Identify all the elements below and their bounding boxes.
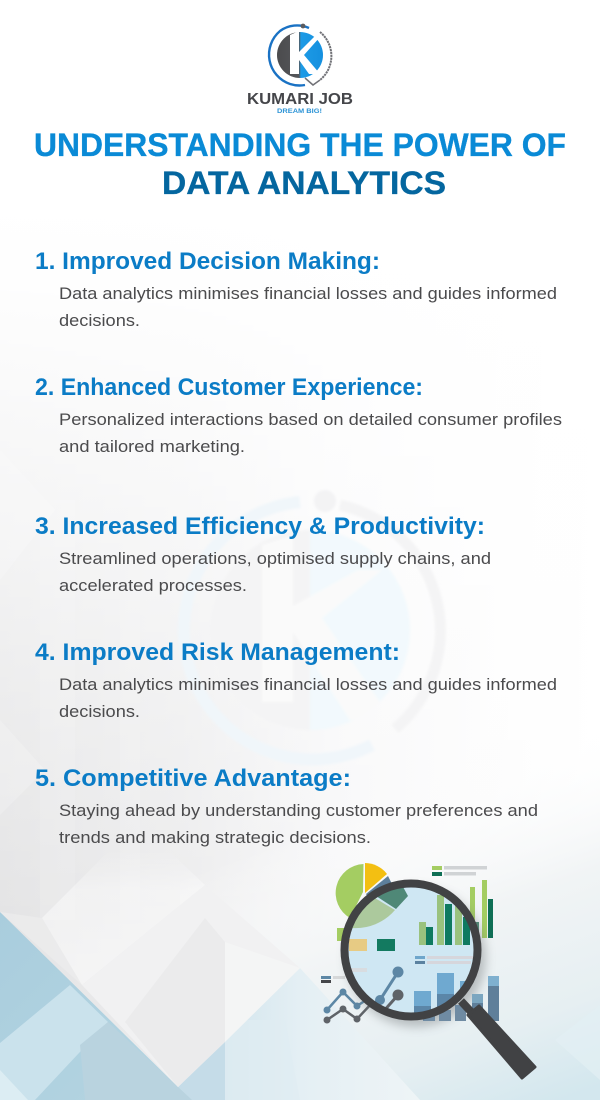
section 2: [35, 374, 562, 456]
lens shadow: [346, 887, 486, 1027]
section 5: 5. Competitive Advantage:: [35, 765, 351, 792]
watermark logo: [222, 492, 444, 764]
tagline: DREAM BIG!: [277, 108, 322, 115]
section 4: decisions.: [59, 702, 140, 721]
section 1: Data analytics minimises financial losses and guides informed: [59, 284, 557, 303]
outer bars: [470, 880, 493, 938]
section 3: accelerated processes.: [59, 576, 247, 595]
section 2: 2. Enhanced Customer Experience:: [35, 374, 423, 401]
section 5: [35, 765, 538, 847]
title: DATA ANALYTICS: [162, 165, 446, 201]
top bar chart legend: [432, 866, 487, 876]
line chart legend: [321, 976, 345, 983]
section 2: and tailored marketing.: [59, 437, 245, 456]
section 4: Data analytics minimises financial losses and guides informed: [59, 675, 557, 694]
pie chart: [336, 863, 393, 918]
section 4: [35, 639, 557, 721]
section 5: trends and making strategic decisions.: [59, 828, 371, 847]
section 5: Staying ahead by understanding customer preferences and: [59, 801, 538, 820]
section 1: decisions.: [59, 311, 140, 330]
section 3: 3. Increased Efficiency & Productivity:: [35, 513, 485, 540]
section 4: 4. Improved Risk Management:: [35, 639, 400, 666]
section 2: Personalized interactions based on detailed consumer profiles: [59, 410, 562, 429]
section 1: [35, 248, 557, 330]
illustration: magnifier over charts: [321, 863, 535, 1078]
logo: [247, 24, 353, 115]
title: [34, 127, 566, 201]
icon: Kumari Job emblem: [247, 24, 353, 115]
lower bars outside lens: [423, 976, 499, 1021]
magnifier ring: [344, 884, 478, 1016]
section 1: 1. Improved Decision Making:: [35, 248, 380, 275]
pale diamond bands: [0, 850, 300, 1087]
bottom-left blue diamonds: [0, 912, 192, 1100]
lens contents: [348, 888, 474, 1012]
small legend block: [337, 928, 345, 941]
section 3: Streamlined operations, optimised supply chains, and: [59, 549, 491, 568]
line chart: [324, 988, 372, 1024]
title: UNDERSTANDING THE POWER OF: [34, 127, 566, 163]
magnifier handle: [461, 1001, 535, 1078]
section 3: [35, 513, 491, 595]
company name: KUMARI JOB: [247, 91, 353, 108]
